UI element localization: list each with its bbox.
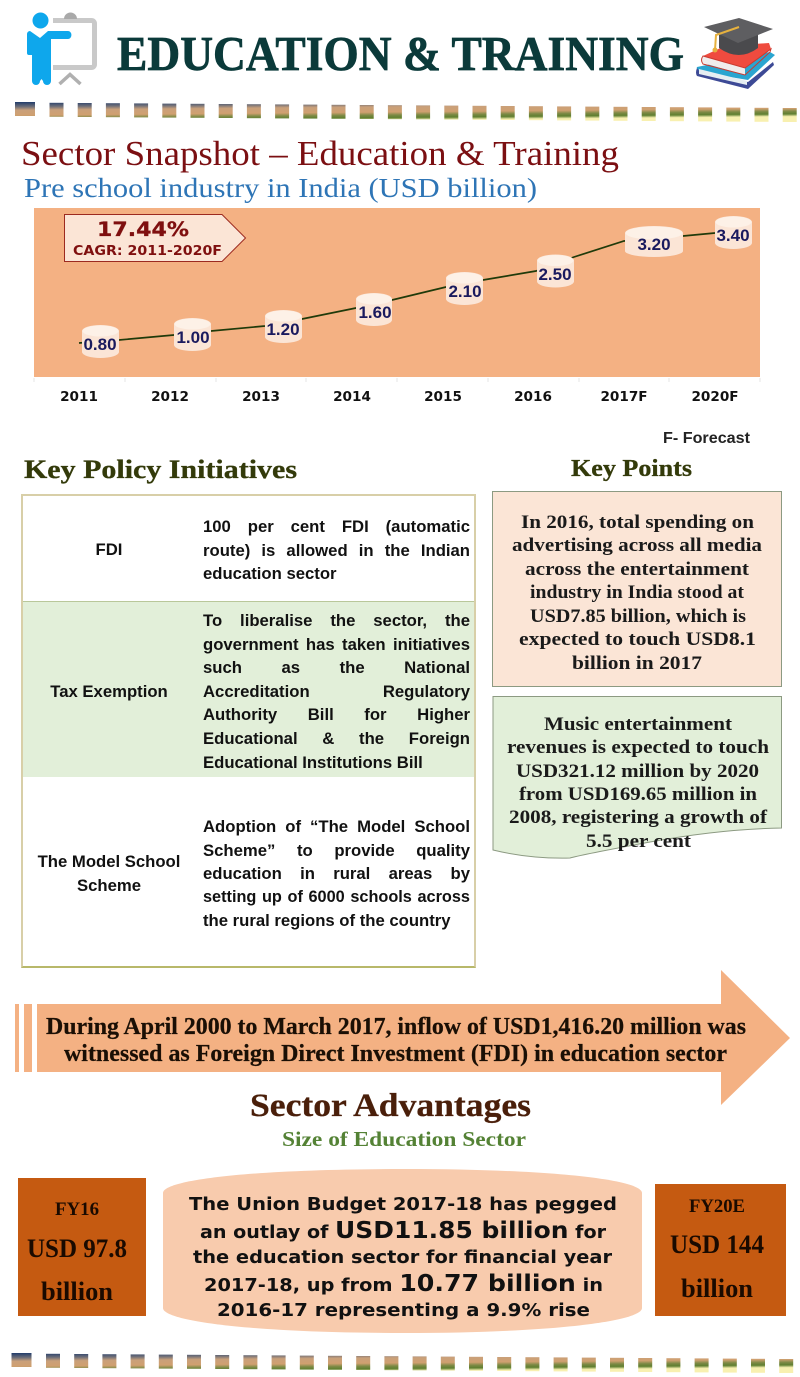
callout: CAGR	[64, 214, 246, 262]
x axis labels: 2016	[514, 389, 552, 405]
panel: key point music	[493, 696, 782, 858]
row: tax exemption: Educational Institutions Bill	[203, 753, 423, 772]
divider strip: top	[15, 102, 797, 122]
panel: FY16: FY16	[55, 1199, 99, 1220]
row: model school scheme: setting up of 6000 schools across	[203, 888, 470, 906]
data values	[83, 226, 750, 354]
subheading: size of education sector: Size of Education Sector	[282, 1127, 526, 1151]
x axis labels: 2014	[333, 389, 371, 405]
panel: key point music: 2008, registering a growth of	[509, 807, 768, 828]
row: FDI	[23, 496, 474, 601]
panel: key point music: 5.5 per cent	[586, 831, 692, 852]
callout: CAGR: 17.44%	[97, 218, 189, 241]
panel: union budget callout: the education sector for financial year	[193, 1247, 612, 1268]
panel: key point spending: industry in India stood at	[530, 582, 745, 603]
data values: 1.60	[358, 303, 392, 322]
panel: key point spending: USD7.85 billion, which is	[530, 606, 746, 627]
x axis labels: 2017F	[600, 389, 648, 405]
row: FDI: 100 per cent FDI (automatic	[203, 517, 470, 536]
data values: 3.20	[637, 235, 671, 254]
callout: CAGR: CAGR: 2011-2020F	[73, 244, 222, 259]
heading: sector snapshot: Sector Snapshot – Education & Training	[21, 134, 619, 173]
panel: key point music: from USD169.65 million in	[519, 784, 757, 805]
icon: graduation cap on books	[696, 18, 775, 89]
panel: FY20E: billion	[681, 1274, 754, 1303]
panel: union budget callout: 2017-18, up from 10.77 billion in	[204, 1269, 603, 1297]
x axis labels: 2013	[242, 389, 280, 405]
heading: key policy initiatives: Key Policy Initiatives	[24, 455, 297, 484]
data values: 3.40	[716, 226, 750, 245]
panel: FY16: USD 97.8	[27, 1234, 127, 1263]
row: model school scheme: Scheme	[77, 876, 141, 895]
panel: key point music: USD321.12 million by 2020	[516, 761, 759, 782]
panel: union budget callout: an outlay of USD11.85 billion for	[200, 1216, 606, 1244]
row: model school scheme: the rural regions of the country	[203, 911, 451, 930]
panel: key point spending: billion in 2017	[572, 653, 703, 674]
x axis labels	[60, 389, 739, 405]
icon: trainer at presentation board	[27, 12, 94, 85]
row: FDI: route) is allowed in the Indian	[203, 541, 470, 560]
row: tax exemption: government has taken initiatives	[203, 635, 470, 654]
arrow: FDI inflow: During April 2000 to March 2017, inflow of USD1,416.20 million was	[46, 1013, 746, 1040]
panel: key point spending: expected to touch USD8.1	[519, 629, 756, 650]
row: tax exemption: Authority Bill for Higher	[203, 705, 470, 724]
row: model school scheme	[23, 777, 474, 966]
subheading: pre school industry: Pre school industry in India (USD billion)	[24, 173, 537, 203]
panel: key point spending	[492, 492, 782, 686]
data values: 0.80	[83, 335, 117, 354]
panel: union budget callout: The Union Budget 2017-18 has pegged	[189, 1194, 617, 1215]
data values: 2.50	[538, 265, 572, 284]
data values: 2.10	[448, 282, 482, 301]
row: tax exemption: Accreditation Regulatory	[203, 682, 470, 701]
panel: FY16: billion	[41, 1277, 114, 1306]
forecast note: F- Forecast	[663, 430, 751, 447]
row: tax exemption: To liberalise the sector, the	[203, 611, 470, 630]
row: FDI: education sector	[203, 564, 337, 583]
table: key policy initiatives	[21, 494, 476, 968]
panel: union budget callout: 2016-17 representing a 9.9% rise	[217, 1300, 590, 1321]
panel: key point music: revenues is expected to touch	[507, 737, 769, 758]
arrow: FDI inflow: witnessed as Foreign Direct Investment (FDI) in education sector	[64, 1040, 727, 1067]
data point cylinders	[82, 216, 752, 358]
x axis labels: 2020F	[691, 389, 739, 405]
panel: key point spending: advertising across all media	[512, 535, 763, 556]
arrow: FDI inflow	[15, 970, 790, 1105]
heading: sector advantages: Sector Advantages	[250, 1088, 531, 1124]
x axis labels: 2012	[151, 389, 189, 405]
row: tax exemption: Tax Exemption	[50, 682, 168, 701]
x axis labels: 2015	[424, 389, 462, 405]
panel: key point spending: across the entertainment	[525, 559, 750, 580]
panel: FY20E: USD 144	[670, 1230, 764, 1259]
panel: FY16	[18, 1178, 146, 1316]
panel: FY20E	[655, 1184, 786, 1316]
panel: key point music: Music entertainment	[544, 714, 733, 735]
x axis labels: 2011	[60, 389, 98, 405]
row: model school scheme: education in rural areas by	[203, 864, 470, 883]
panel: union budget callout	[163, 1169, 642, 1333]
heading: key points: Key Points	[571, 456, 692, 482]
panel: FY20E: FY20E	[689, 1196, 745, 1217]
row: model school scheme: The Model School	[38, 852, 180, 871]
row: tax exemption	[23, 601, 474, 777]
row: model school scheme: Scheme” to provide quality	[203, 841, 470, 860]
chart: pre school industry line chart	[34, 208, 760, 405]
row: tax exemption: Educational & the Foreign	[203, 729, 470, 748]
data values: 1.20	[266, 320, 300, 339]
row: tax exemption: such as the National	[203, 658, 470, 677]
divider strip: bottom	[12, 1353, 793, 1373]
panel: key point spending: In 2016, total spending on	[521, 512, 754, 533]
title: EDUCATION & TRAINING	[117, 26, 684, 81]
row: model school scheme: Adoption of “The Model School	[203, 817, 470, 836]
data values: 1.00	[176, 328, 210, 347]
row: FDI: FDI	[96, 540, 122, 559]
